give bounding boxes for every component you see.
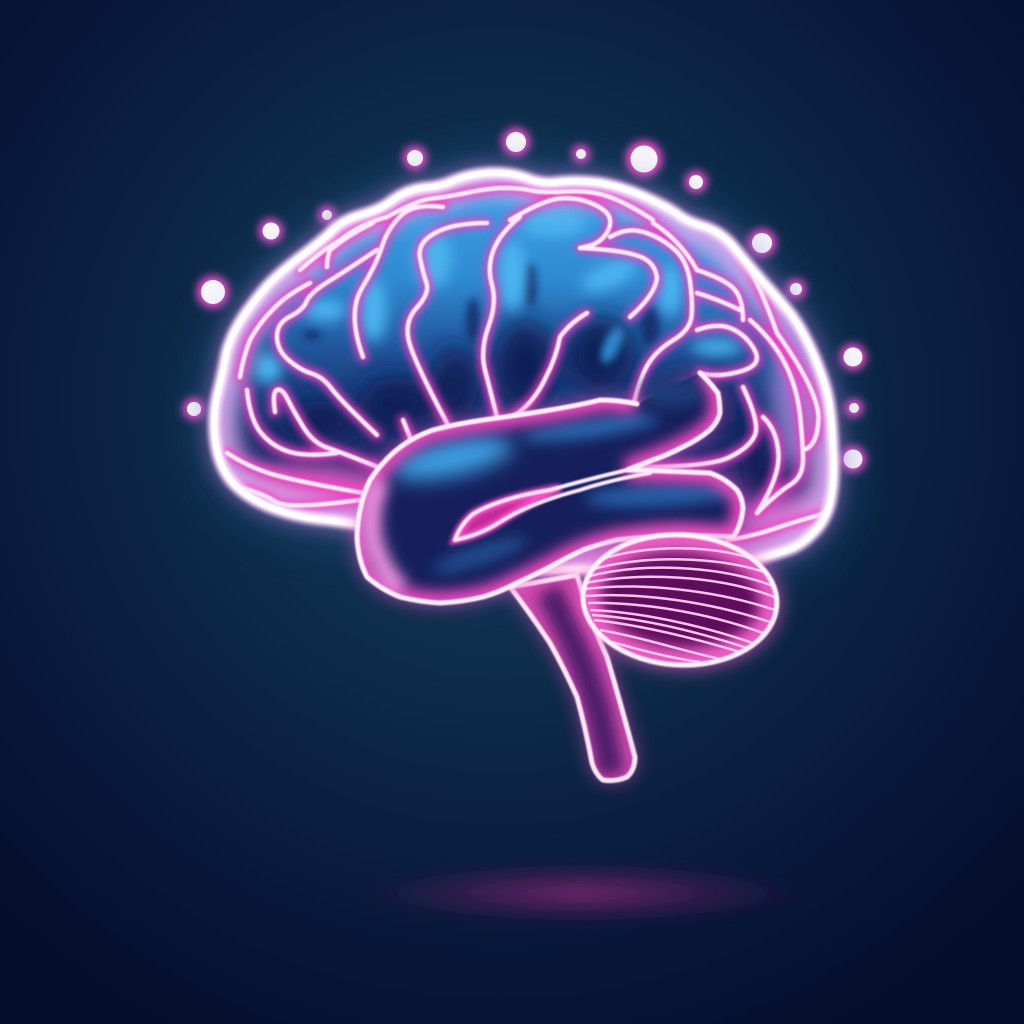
white sulci lines [227, 188, 827, 540]
floating glowing particles [183, 128, 866, 472]
pink lower-left folds [205, 466, 385, 514]
temporal lobe outline [357, 373, 743, 603]
pink halo at brain rim [214, 173, 834, 570]
cerebrum outline [214, 173, 834, 570]
bright gyri highlights [254, 208, 743, 384]
temporal lobe [357, 373, 743, 603]
blend of upper band into the frontal gyrus [640, 376, 704, 408]
lilac outer rim shading [214, 173, 834, 570]
pink sulci glow [227, 188, 827, 540]
dark sulcal shadows [288, 317, 782, 501]
brainstem [510, 575, 635, 781]
floor glow shadow [354, 861, 810, 925]
wide blue halo behind the brain [214, 173, 834, 570]
cerebrum [205, 173, 840, 570]
cerebellum [577, 527, 783, 673]
temporal lobe blue highlights [388, 428, 516, 488]
cerebellum stripes [585, 535, 777, 665]
temporal lobe inner slit [455, 470, 650, 540]
temporal lobe pink inner glow [357, 373, 743, 603]
